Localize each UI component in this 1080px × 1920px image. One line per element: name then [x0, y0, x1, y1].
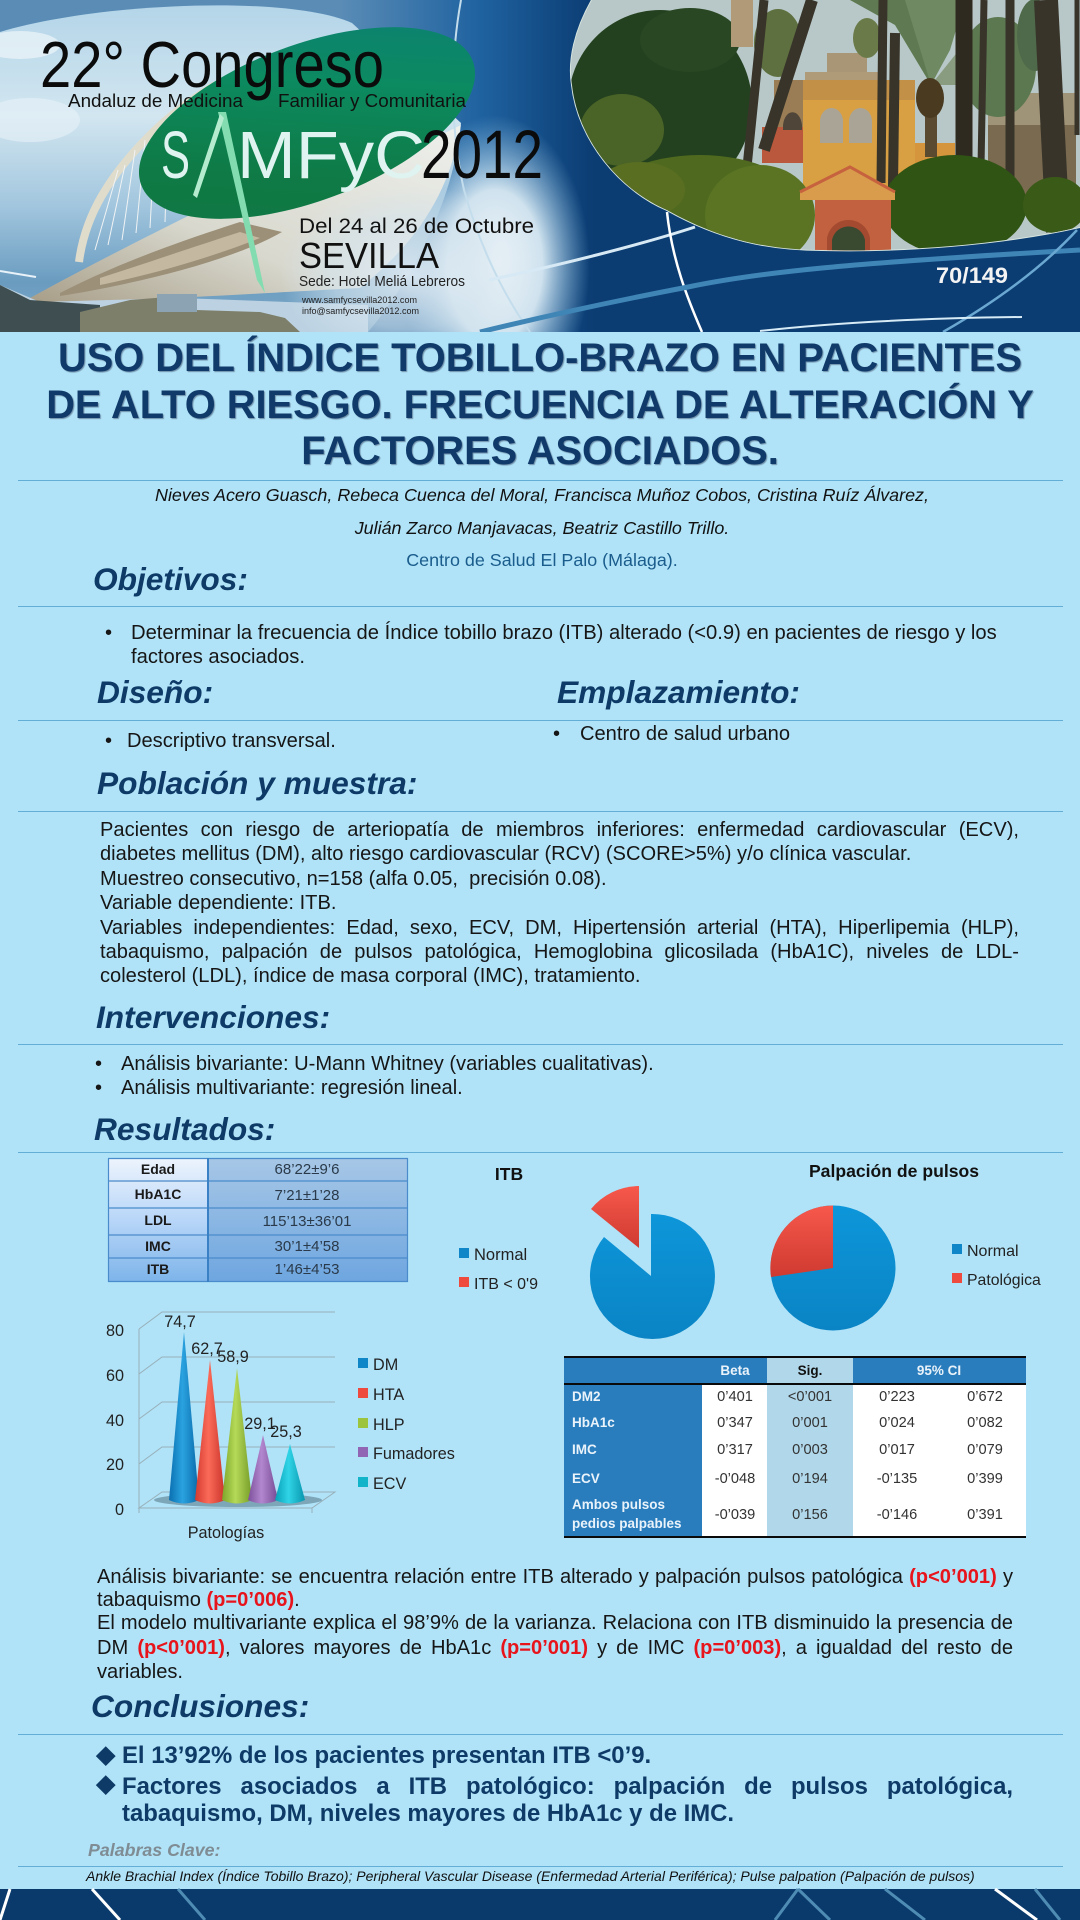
table: multivariate regression: 0’024	[879, 1415, 915, 1431]
table: multivariate regression: Ambos pulsos	[572, 1497, 665, 1512]
banner: congress header	[0, 0, 1080, 332]
authors	[155, 485, 929, 570]
banner: congress header: 2012	[421, 116, 543, 193]
text: results analysis: variables.	[97, 1661, 183, 1683]
table: multivariate regression: <0’001	[788, 1389, 832, 1405]
text: conclusions: Factores asociados a ITB patológico: palpación de pulsos patológica,	[122, 1773, 1013, 1800]
table: multivariate regression: 0’399	[967, 1471, 1003, 1487]
text: población: Variables independientes: Edad, sexo, ECV, DM, Hipertensión arterial (HTA), Hiperlipemia (HLP),	[100, 917, 1019, 939]
chart: patologías cones: 62,7	[191, 1340, 223, 1358]
title: DE ALTO RIESGO. FRECUENCIA DE ALTERACIÓN Y	[46, 383, 1034, 427]
authors: Nieves Acero Guasch, Rebeca Cuenca del Moral, Francisca Muñoz Cobos, Cristina Ruíz Álvarez,	[155, 485, 929, 505]
heading: Población y muestra: Población y muestra:	[97, 765, 417, 801]
table: multivariate regression: Sig.	[798, 1363, 822, 1378]
chart: patologías cones: 60	[106, 1367, 124, 1385]
chart: patologías cones: Fumadores	[373, 1445, 455, 1463]
banner: congress header: info@samfycsevilla2012.com	[302, 306, 419, 316]
table: multivariate regression: DM2	[572, 1389, 601, 1404]
chart: patologías cones	[106, 1312, 455, 1542]
text: keywords: Ankle Brachial Index (Índice Tobillo Brazo); Peripheral Vascular Disease (Enfermedad Arterial Periférica); Pulse palpation (Palpación de pulsos)	[86, 1868, 975, 1884]
text: conclusions: tabaquismo, DM, niveles mayores de HbA1c y de IMC.	[122, 1800, 734, 1827]
banner: congress header: Andaluz de Medicina	[68, 90, 244, 111]
table: multivariate regression: IMC	[572, 1442, 597, 1457]
table: descriptive values: 1’46±4’53	[275, 1261, 339, 1278]
chart: ITB pie: ITB < 0'9	[474, 1276, 538, 1293]
table: descriptive values: IMC	[145, 1238, 171, 1254]
table: multivariate regression: 0’317	[717, 1442, 753, 1458]
text: intervenciones: Análisis bivariante: U-Mann Whitney (variables cualitativas).	[121, 1053, 654, 1075]
table: descriptive values	[108, 1158, 408, 1282]
text: objetivos: •	[105, 622, 112, 644]
text: results analysis: DM (p<0’001), valores mayores de HbA1c (p=0’001) y de IMC (p=0’003), a igualdad del resto de	[97, 1637, 1013, 1659]
text: results analysis: El modelo multivariante explica el 98’9% de la varianza. Relaciona con ITB disminuido la presencia de	[97, 1612, 1013, 1634]
banner: congress header: Familiar y Comunitaria	[278, 90, 467, 111]
text: objetivos: factores asociados.	[131, 646, 305, 668]
text: intervenciones: •	[95, 1077, 102, 1099]
text: población: colesterol (LDL), índice de masa corporal (IMC), tratamiento.	[100, 965, 641, 987]
table: multivariate regression: -0’135	[877, 1471, 917, 1487]
chart: patologías cones: 25,3	[270, 1423, 302, 1441]
chart: patologías cones: ECV	[373, 1475, 406, 1493]
banner: congress header: 70/149	[936, 263, 1008, 288]
table: multivariate regression: 0’672	[967, 1389, 1003, 1405]
text: intervenciones	[95, 1053, 654, 1099]
text: intervenciones: •	[95, 1053, 102, 1075]
chart: patologías cones: 80	[106, 1322, 124, 1340]
table: descriptive values: 30’1±4’58	[275, 1238, 339, 1255]
chart: palpación de pulsos pie: Normal	[967, 1243, 1019, 1260]
text: población: tabaquismo, palpación de pulsos patológica, Hemoglobina glicosilada (HbA1C), niveles de LDL-	[100, 941, 1019, 963]
chart: patologías cones: 29,1	[244, 1415, 276, 1433]
title: USO DEL ÍNDICE TOBILLO-BRAZO EN PACIENTES	[58, 336, 1022, 380]
table: descriptive values: HbA1C	[135, 1186, 181, 1202]
table: multivariate regression: HbA1c	[572, 1415, 615, 1430]
table: multivariate regression: -0’146	[877, 1507, 917, 1523]
chart: palpación de pulsos pie: Patológica	[967, 1272, 1041, 1289]
text: emplazamiento: •	[553, 723, 560, 745]
table: descriptive values: 7’21±1’28	[275, 1187, 339, 1204]
table: descriptive values: ITB	[147, 1261, 169, 1277]
table: multivariate regression: 0’079	[967, 1442, 1003, 1458]
table: multivariate regression: ECV	[572, 1471, 600, 1486]
title: FACTORES ASOCIADOS.	[301, 429, 779, 473]
table: multivariate regression: Beta	[720, 1363, 750, 1378]
table: descriptive values: 115’13±36’01	[263, 1213, 351, 1230]
chart: patologías cones: 20	[106, 1456, 124, 1474]
chart: patologías cones: 0	[115, 1501, 124, 1519]
text: results analysis: Análisis bivariante: se encuentra relación entre ITB alterado y palpación pulsos patológica (p<0’001) y	[97, 1566, 1013, 1588]
text: población: Muestreo consecutivo, n=158 (alfa 0.05, precisión 0.08).	[100, 868, 607, 890]
table: multivariate regression: 0’003	[792, 1442, 828, 1458]
banner: congress header: Sede: Hotel Meliá Lebreros	[299, 273, 465, 290]
table: multivariate regression: 0’156	[792, 1507, 828, 1523]
heading: Emplazamiento: Emplazamiento:	[557, 674, 800, 710]
text: población: Variable dependiente: ITB.	[100, 892, 336, 914]
table: multivariate regression: 0’391	[967, 1507, 1003, 1523]
text: objetivos: Determinar la frecuencia de Índice tobillo brazo (ITB) alterado (<0.9) en pacientes de riesgo y los	[131, 622, 997, 644]
authors: Centro de Salud El Palo (Málaga).	[406, 550, 678, 570]
chart: patologías cones: DM	[373, 1356, 398, 1374]
chart: patologías cones: Patologías	[188, 1524, 264, 1542]
table: multivariate regression: -0’048	[715, 1471, 755, 1487]
heading: Objetivos: Objetivos:	[93, 561, 248, 597]
text: emplazamiento: Centro de salud urbano	[580, 723, 790, 745]
heading: Resultados: Resultados:	[94, 1111, 275, 1147]
table: descriptive values: LDL	[144, 1212, 172, 1228]
table: descriptive values: 68’22±9’6	[275, 1161, 339, 1178]
text: objetivos	[105, 621, 997, 668]
text: intervenciones: Análisis multivariante: regresión lineal.	[121, 1077, 463, 1099]
table: multivariate regression: 0’194	[792, 1471, 828, 1487]
chart: ITB pie: Normal	[474, 1246, 527, 1264]
text: results analysis: tabaquismo (p=0’006).	[97, 1589, 300, 1611]
table: multivariate regression: 0’401	[717, 1389, 753, 1405]
banner: congress header: 22° Congreso	[40, 28, 384, 101]
text: conclusions	[96, 1742, 1013, 1827]
banner: congress header: www.samfycsevilla2012.com	[301, 295, 417, 305]
banner: congress header: SEVILLA	[299, 235, 439, 276]
title	[46, 336, 1034, 473]
chart: patologías cones: 40	[106, 1412, 124, 1430]
heading: Palabras Clave: Palabras Clave:	[88, 1840, 220, 1860]
table: multivariate regression: 0’223	[879, 1389, 915, 1405]
table: descriptive values: Edad	[141, 1161, 175, 1177]
chart: patologías cones: 74,7	[164, 1313, 196, 1331]
chart: palpación de pulsos pie	[770, 1161, 1041, 1330]
table: multivariate regression: 0’082	[967, 1415, 1003, 1431]
heading: Diseño: Diseño:	[97, 674, 213, 710]
heading: Intervenciones: Intervenciones:	[96, 999, 330, 1035]
text: diseño: Descriptivo transversal.	[127, 730, 336, 752]
table: multivariate regression: 95% CI	[917, 1363, 961, 1378]
heading: Conclusiones: Conclusiones:	[91, 1688, 309, 1724]
table: multivariate regression: -0’039	[715, 1507, 755, 1523]
banner: congress header: MFyC	[237, 118, 425, 193]
chart: ITB pie: ITB	[495, 1164, 523, 1184]
banner: congress header: Del 24 al 26 de Octubre	[299, 214, 534, 238]
table: multivariate regression: 0’347	[717, 1415, 753, 1431]
text: results analysis	[97, 1566, 1013, 1683]
footer band	[0, 1888, 1080, 1920]
chart: palpación de pulsos pie: Palpación de pulsos	[809, 1161, 979, 1181]
text: diseño: •	[105, 730, 112, 752]
table: multivariate regression	[564, 1356, 1026, 1538]
table: multivariate regression: 0’001	[792, 1415, 828, 1431]
chart: patologías cones: HTA	[373, 1386, 404, 1404]
text: población: diabetes mellitus (DM), alto riesgo cardiovascular (RCV) (SCORE>5%) y/o clínica vascular.	[100, 843, 911, 865]
text: población	[100, 819, 1019, 987]
text: población: Pacientes con riesgo de arteriopatía de miembros inferiores: enfermedad cardiovascular (ECV),	[100, 819, 1019, 841]
text: conclusions: El 13’92% de los pacientes presentan ITB <0’9.	[122, 1742, 651, 1769]
chart: patologías cones: HLP	[373, 1416, 404, 1434]
table: multivariate regression: pedios palpables	[572, 1516, 682, 1531]
chart: patologías cones: 58,9	[217, 1348, 249, 1366]
banner: congress header: S	[161, 118, 190, 193]
chart: ITB pie	[459, 1164, 715, 1339]
authors: Julián Zarco Manjavacas, Beatriz Castillo Trillo.	[355, 518, 729, 538]
table: multivariate regression: 0’017	[879, 1442, 915, 1458]
